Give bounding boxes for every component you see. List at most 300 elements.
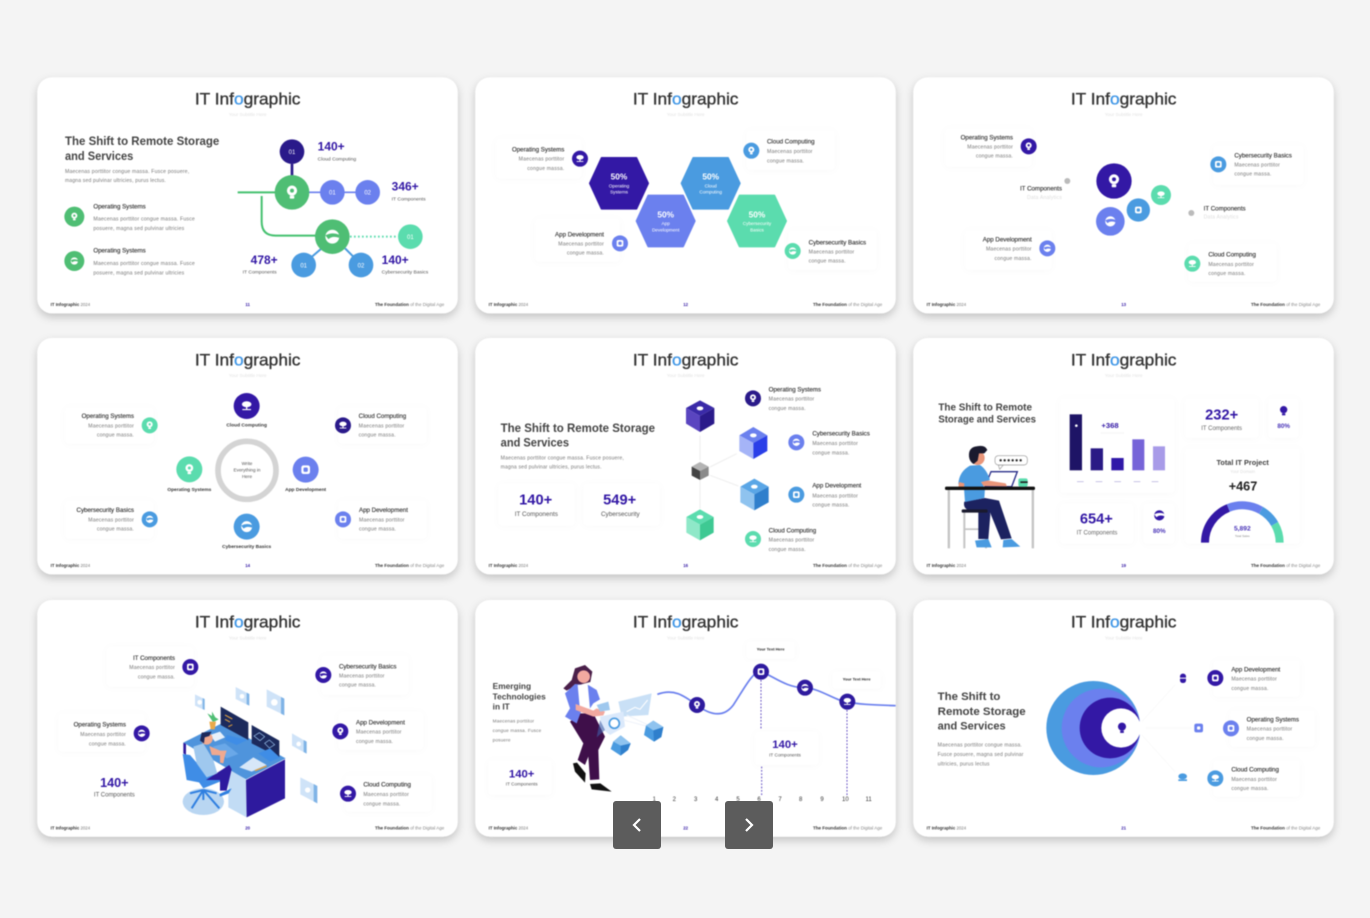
stat card: 549+: 549+ — [603, 493, 636, 509]
footer: 19 — [1121, 563, 1127, 568]
callout: operating systems: Operating Systems — [961, 134, 1013, 141]
small icon: cloud — [1178, 773, 1187, 781]
callout: cybersecurity basics — [785, 230, 877, 270]
connector lines — [1140, 685, 1192, 772]
cube: periwinkle — [739, 427, 767, 459]
title: IT Infographic — [195, 350, 300, 369]
callout: cloud computing: Cloud Computing — [363, 782, 411, 789]
callout: operating systems: congue massa. — [97, 433, 134, 439]
hexagon: cybersecurity basics — [728, 196, 786, 246]
heading — [938, 402, 1036, 426]
callout: cybersecurity basics: Cybersecurity Basics — [809, 239, 866, 246]
label: it components right — [1188, 206, 1246, 221]
node: cybersecurity basics — [222, 514, 272, 550]
footer: 22 — [683, 825, 689, 830]
stat card: 549+: Cybersecurity — [601, 511, 641, 518]
intro text: Maecenas porttitor — [493, 719, 535, 724]
stat card: 140+ chart: 140+ — [772, 739, 798, 751]
callout: it components: IT Components — [133, 655, 175, 662]
stat: 346+ it components: IT Components — [392, 197, 426, 203]
x axis labels: 10 — [842, 797, 849, 803]
node: operating systems: Operating Systems — [167, 487, 212, 493]
item: app development — [788, 483, 862, 509]
footer: The Foundation of the Digital Age — [1251, 563, 1321, 568]
tree diagram: 01 — [300, 263, 308, 269]
item: cloud computing: Maecenas porttitor — [769, 537, 814, 543]
callout: cloud computing: congue massa. — [363, 801, 400, 807]
label: it components right: IT Components — [1204, 206, 1246, 213]
callout: cloud computing: Cloud Computing — [1208, 252, 1256, 259]
item: cloud computing: Cloud Computing — [769, 527, 817, 534]
callout: operating systems — [65, 407, 158, 444]
subtitle: Your Subtitle Here — [667, 112, 705, 117]
footer: The Foundation of the Digital Age — [375, 302, 445, 307]
callout: cybersecurity basics: Cybersecurity Basics — [77, 507, 134, 514]
heading: and Services — [938, 721, 1006, 733]
stat: 478+ it components: 478+ — [251, 253, 278, 267]
item: cybersecurity basics — [788, 431, 870, 456]
callout: operating systems — [496, 138, 588, 178]
callout: cloud computing: Cloud Computing — [767, 139, 815, 146]
footer: 11 — [245, 302, 251, 307]
panel: slide 14 radial ring — [37, 338, 458, 574]
tree diagram: 02 — [364, 191, 372, 197]
x axis labels: 7 — [778, 797, 782, 803]
callout: operating systems: congue massa. — [89, 741, 126, 747]
x axis labels: 1 — [653, 797, 657, 803]
callout: app development: congue massa. — [359, 527, 396, 533]
x axis labels: 2 — [673, 797, 677, 803]
callout: cloud computing — [743, 130, 835, 170]
callout: cybersecurity basics: Maecenas porttitor — [88, 517, 134, 523]
callout: cloud computing: congue massa. — [767, 158, 804, 164]
label: it components left: Data Analytics — [1027, 195, 1062, 201]
hexagon: operating systems: Operating — [609, 183, 630, 188]
cube: mint — [686, 509, 714, 540]
footer: IT Infographic 2024 — [927, 302, 967, 307]
x axis labels: 5 — [736, 797, 740, 803]
gauge card: total it project: 5,892 — [1234, 526, 1251, 533]
callout: operating systems: Operating Systems — [512, 147, 564, 154]
callout: operating systems: Operating Systems — [82, 413, 134, 420]
footer: IT Infographic 2024 — [489, 302, 529, 307]
callout: cybersecurity basics: congue massa. — [97, 527, 134, 533]
hexagon: cloud computing: Computing — [699, 190, 722, 195]
footer: 12 — [683, 302, 689, 307]
hexagon: cloud computing: Cloud — [705, 183, 717, 188]
tree diagram — [238, 139, 423, 277]
item: cybersecurity basics: Cybersecurity Basics — [812, 431, 870, 438]
footer: 16 — [683, 563, 689, 568]
callout: cloud computing: Cloud Computing — [359, 413, 407, 420]
button: next arrow — [725, 801, 773, 849]
callout: cybersecurity basics: congue massa. — [1234, 172, 1271, 178]
footer: IT Infographic 2024 — [927, 563, 967, 568]
footer: 20 — [245, 825, 251, 830]
gauge card: total it project: Your Domain — [1230, 469, 1256, 474]
chart callouts — [747, 642, 881, 688]
stat card: 140+ left: 140+ — [509, 768, 535, 780]
subtitle: Your Subtitle Here — [1105, 112, 1143, 117]
item: operating systems: congue massa. — [769, 406, 806, 412]
footer: 14 — [245, 563, 251, 568]
hexagon: cybersecurity basics: Basics — [750, 227, 765, 232]
stat: 478+ it components: IT Components — [243, 270, 277, 276]
center ring: Everything in — [234, 468, 261, 473]
callout: operating systems: Maecenas porttitor — [1247, 727, 1292, 733]
stat card: 140+ left: IT Components — [506, 782, 538, 787]
heading: in IT — [493, 702, 510, 712]
panel: slide 12 hexagons — [475, 77, 896, 313]
callout: cloud computing: Cloud Computing — [1231, 767, 1279, 774]
button: previous arrow — [613, 801, 661, 849]
circle cluster — [1096, 163, 1171, 236]
callout: operating systems: Maecenas porttitor — [519, 157, 564, 163]
footer — [51, 302, 445, 307]
callout: cybersecurity basics — [1210, 145, 1303, 185]
hexagon: cybersecurity basics: 50% — [749, 209, 766, 219]
heading: Emerging — [493, 681, 531, 691]
callout: app development: App Development — [983, 236, 1032, 243]
title: IT Infographic — [195, 90, 300, 109]
item: app development: App Development — [812, 483, 862, 490]
callout: cybersecurity basics: Cybersecurity Basics — [1234, 152, 1292, 159]
stat card: 232+: 232+ — [1205, 407, 1238, 423]
callout: cloud computing: Maecenas porttitor — [363, 792, 409, 798]
stat: 140+ cybersecurity: Cybersecurity Basics — [382, 270, 429, 276]
floating tiles — [195, 687, 317, 803]
intro text: Fusce posuere, magna sed pulvinar — [938, 752, 1024, 758]
hexagon: app development: 50% — [657, 209, 675, 219]
panel: slide 19 dashboard — [913, 338, 1334, 574]
heading: The Shift to Remote Storage — [65, 134, 220, 148]
node: cloud computing — [226, 393, 267, 429]
stat: 478+ it components — [243, 253, 278, 276]
footer: The Foundation of the Digital Age — [813, 563, 883, 568]
callout: operating systems: Operating Systems — [74, 722, 126, 729]
subtitle: Your Subtitle Here — [229, 112, 267, 117]
stat card: 140+ — [498, 484, 575, 525]
callout: cloud computing — [335, 407, 427, 444]
panel: slide 21 crescents — [913, 600, 1334, 837]
intro text: Maecenas porttitor congue massa. — [938, 743, 1022, 749]
callout: operating systems: Maecenas porttitor — [967, 144, 1013, 150]
title: IT Infographic — [195, 613, 300, 632]
callout: cloud computing: Maecenas porttitor — [359, 423, 404, 429]
bar chart card — [1060, 398, 1174, 493]
footer: 21 — [1121, 825, 1127, 830]
hexagon: app development: App — [662, 221, 670, 226]
title: IT Infographic — [633, 613, 738, 632]
callout: cloud computing: Maecenas porttitor — [1208, 262, 1254, 268]
item: operating systems 1 — [64, 203, 195, 232]
intro text — [938, 743, 1024, 767]
illustration: woman with screens and cubes — [563, 665, 663, 792]
footer — [927, 825, 1321, 830]
intro text: ultricies, purus lectus — [938, 761, 990, 767]
title: IT Infographic — [1071, 350, 1176, 369]
callout: operating systems — [1223, 710, 1315, 747]
item: operating systems 1: posuere, magna sed pulvinar ultricies — [93, 226, 185, 232]
item: operating systems 2: Maecenas porttitor congue massa. Fusce — [93, 261, 195, 267]
title: IT Infographic — [1071, 613, 1176, 632]
callout: app development: App Development — [555, 231, 604, 238]
stat card: 80% bulb: 80% — [1277, 423, 1290, 430]
stat card: 80% globe — [1143, 504, 1174, 544]
stat: 140+ cybersecurity — [382, 253, 429, 276]
callout: app development: congue massa. — [356, 739, 393, 745]
illustration: person at isometric desk — [183, 707, 286, 817]
x axis labels — [653, 797, 872, 803]
chart nodes — [689, 664, 855, 713]
callout: cloud computing: Maecenas porttitor — [1231, 777, 1277, 783]
footer: The Foundation of the Digital Age — [813, 302, 883, 307]
node: operating systems — [167, 456, 212, 493]
node: app development: App Development — [285, 487, 327, 493]
callout: cloud computing — [340, 775, 432, 812]
small icon: app — [1180, 674, 1186, 683]
callout: app development: congue massa. — [567, 251, 604, 257]
tree diagram: 01 — [407, 235, 414, 241]
callout: cloud computing: Maecenas porttitor — [767, 149, 813, 155]
callout: app development: congue massa. — [1231, 686, 1268, 692]
stat: 346+ it components — [392, 180, 426, 203]
hexagon: cybersecurity basics: Cybersecurity — [743, 221, 772, 226]
subtitle: Your Subtitle Here — [667, 373, 705, 378]
panel: slide 11 storage tree — [37, 77, 458, 313]
footer: The Foundation of the Digital Age — [375, 825, 445, 830]
chart callouts: Your Text Here — [757, 647, 785, 652]
callout: app development: Maecenas porttitor — [359, 517, 405, 523]
tree diagram: 01 — [329, 191, 336, 197]
footer: IT Infographic 2024 — [51, 825, 91, 830]
item: operating systems 2 — [64, 248, 195, 276]
callout: cloud computing: congue massa. — [1231, 786, 1268, 792]
callout: it components: Maecenas porttitor — [129, 665, 175, 671]
callout: cloud computing: congue massa. — [1208, 271, 1245, 277]
stat: 140+: 140+ — [100, 776, 129, 790]
item: operating systems: Maecenas porttitor — [769, 397, 814, 403]
item: cybersecurity basics: Maecenas porttitor — [812, 441, 858, 447]
footer: The Foundation of the Digital Age — [1251, 825, 1321, 830]
item: operating systems — [745, 386, 821, 412]
footer: The Foundation of the Digital Age — [1251, 302, 1321, 307]
heading: The Shift to Remote — [938, 402, 1033, 413]
callout: app development — [535, 218, 628, 262]
stat: 140+ cloud computing: 140+ — [318, 140, 345, 154]
footer — [489, 825, 883, 830]
hexagon: operating systems: 50% — [611, 172, 628, 182]
x axis labels: 8 — [799, 797, 803, 803]
gauge card: total it project: Total Sales — [1235, 534, 1250, 538]
intro text — [501, 456, 624, 471]
item: cloud computing: congue massa. — [769, 547, 806, 553]
footer — [927, 563, 1321, 568]
stat card: 140+ chart: IT Components — [769, 752, 802, 757]
stat card: 232+ — [1185, 398, 1258, 438]
footer: IT Infographic 2024 — [927, 825, 967, 830]
callout: app development — [332, 712, 423, 750]
stat card: 140+ left — [488, 760, 552, 795]
heading: Technologies — [493, 691, 546, 701]
callout: app development — [1207, 660, 1300, 697]
node: cybersecurity basics: Cybersecurity Basics — [222, 544, 272, 550]
title: IT Infographic — [633, 90, 738, 109]
item: operating systems 2: posuere, magna sed pulvinar ultricies — [93, 270, 185, 276]
intro text: magna sed pulvinar ultricies, purus lectus. — [65, 178, 166, 184]
intro text: Maecenas porttitor congue massa. Fusce posuere, — [501, 456, 624, 462]
callout: operating systems: congue massa. — [527, 166, 564, 172]
footer: IT Infographic 2024 — [51, 563, 91, 568]
hexagon: cloud computing: 50% — [702, 172, 720, 182]
subtitle: Your Subtitle Here — [229, 635, 267, 640]
heading: Storage and Services — [938, 415, 1036, 426]
hexagon: operating systems — [590, 158, 648, 209]
hexagon: app development — [637, 196, 695, 246]
center ring: Write — [242, 461, 253, 466]
stat: 140+ — [94, 776, 135, 799]
callout: app development: Maecenas porttitor — [558, 241, 604, 247]
center ring — [218, 441, 276, 499]
subtitle: Your Subtitle Here — [1105, 373, 1143, 378]
cube: blue — [740, 479, 769, 510]
title: IT Infographic — [633, 350, 738, 369]
gauge card: total it project: Total IT Project — [1216, 458, 1269, 467]
stat card: 549+ — [583, 484, 660, 525]
callout: app development: App Development — [356, 720, 405, 727]
heading: and Services — [65, 149, 134, 163]
connector lines — [700, 435, 738, 509]
line chart curve — [657, 672, 896, 714]
heading — [501, 421, 655, 450]
stat card: 232+: IT Components — [1201, 426, 1242, 432]
tree diagram: 02 — [358, 263, 365, 269]
stat card: 80% bulb — [1268, 398, 1298, 438]
stat: 140+ cloud computing — [318, 140, 356, 162]
stat card: 140+: IT Components — [515, 511, 558, 518]
callout: operating systems: congue massa. — [976, 154, 1013, 160]
small icon: chip — [1194, 724, 1203, 732]
footer: IT Infographic 2024 — [51, 302, 91, 307]
footer: IT Infographic 2024 — [489, 825, 529, 830]
callout: app development: App Development — [1231, 666, 1281, 673]
label: it components left — [1020, 178, 1070, 201]
panel: slide 20 isometric desk — [37, 600, 458, 837]
chart callouts: Your Text Here — [843, 676, 871, 681]
footer: IT Infographic 2024 — [489, 563, 529, 568]
callout: it components — [107, 647, 198, 687]
footer: The Foundation of the Digital Age — [375, 563, 445, 568]
x axis labels: 3 — [694, 797, 698, 803]
item: operating systems: Operating Systems — [769, 386, 821, 393]
callout: cloud computing: congue massa. — [359, 433, 396, 439]
hexagon: cloud computing — [682, 158, 740, 209]
item: app development: congue massa. — [812, 503, 849, 509]
callout: operating systems — [945, 128, 1037, 167]
item: app development: Maecenas porttitor — [812, 493, 858, 499]
intro text: posuere — [493, 738, 511, 743]
callout: cybersecurity basics — [315, 655, 408, 695]
gauge card: total it project — [1185, 448, 1300, 544]
footer — [51, 825, 445, 830]
title: IT Infographic — [1071, 90, 1176, 109]
panel: slide 22 timeline — [475, 600, 896, 837]
callout: operating systems: congue massa. — [1247, 736, 1284, 742]
stat card: 654+: 654+ — [1080, 512, 1113, 528]
stat: 140+ cloud computing: Cloud Computing — [318, 156, 356, 162]
x axis labels: 11 — [866, 797, 872, 803]
heading — [65, 134, 220, 163]
intro text: magna sed pulvinar ultricies, purus lectus. — [501, 465, 602, 471]
hexagon: app development: Development — [652, 227, 680, 232]
stat: 346+ it components: 346+ — [392, 180, 419, 194]
callout: app development — [965, 230, 1055, 270]
label: it components right: Data Analytics — [1204, 215, 1239, 221]
callout: operating systems: Maecenas porttitor — [88, 423, 134, 429]
footer: 13 — [1121, 302, 1127, 307]
stat card: 140+ chart — [755, 732, 818, 765]
heading — [493, 681, 546, 712]
panel: slide 16 cubes — [475, 338, 896, 574]
footer: The Foundation of the Digital Age — [813, 825, 883, 830]
callout: app development: Maecenas porttitor — [1231, 677, 1277, 683]
cube: navy — [686, 400, 714, 432]
stat: 140+: IT Components — [94, 793, 135, 799]
callout: app development: Maecenas porttitor — [986, 247, 1032, 253]
heading — [938, 691, 1026, 733]
stat card: 80% globe: 80% — [1153, 528, 1166, 535]
bar chart card: +368 — [1101, 421, 1119, 430]
item: operating systems 2: Operating Systems — [93, 248, 146, 255]
x axis labels: 6 — [757, 797, 761, 803]
callout: cybersecurity basics: Maecenas porttitor — [809, 250, 854, 256]
label: it components left: IT Components — [1020, 185, 1062, 192]
callout: cybersecurity basics: congue massa. — [339, 683, 376, 689]
intro text — [493, 719, 542, 743]
crescent chart — [1046, 681, 1146, 775]
panel: slide 13 circle cluster — [913, 77, 1334, 313]
heading: The Shift to — [938, 691, 1000, 703]
stat: 140+ cybersecurity: 140+ — [382, 253, 409, 267]
intro text — [65, 169, 189, 184]
callout: app development: congue massa. — [995, 256, 1032, 262]
cube: grey center — [692, 462, 709, 480]
callout: app development: Maecenas porttitor — [356, 730, 402, 736]
tree diagram: 01 — [289, 150, 296, 156]
callout: it components: congue massa. — [138, 674, 175, 680]
center ring: Here — [242, 474, 252, 479]
footer — [51, 563, 445, 568]
callout: operating systems: Operating Systems — [1247, 716, 1299, 723]
dashed drop lines — [761, 680, 847, 795]
footer — [927, 302, 1321, 307]
item: operating systems 1: Operating Systems — [93, 203, 146, 210]
heading: and Services — [501, 436, 569, 450]
callout: operating systems — [58, 713, 150, 752]
stat card: 140+: 140+ — [519, 493, 552, 509]
gauge card: total it project: +467 — [1229, 479, 1257, 493]
footer — [489, 302, 883, 307]
item: cloud computing — [745, 527, 817, 553]
intro text: Maecenas porttitor congue massa. Fusce posuere, — [65, 169, 189, 175]
callout: cloud computing — [1207, 760, 1300, 797]
x axis labels: 4 — [715, 797, 719, 803]
footer — [489, 563, 883, 568]
callout: cybersecurity basics: congue massa. — [809, 259, 846, 265]
stat card: 654+: IT Components — [1077, 531, 1117, 537]
callout: operating systems: Maecenas porttitor — [80, 732, 126, 738]
node: cloud computing: Cloud Computing — [226, 423, 267, 429]
